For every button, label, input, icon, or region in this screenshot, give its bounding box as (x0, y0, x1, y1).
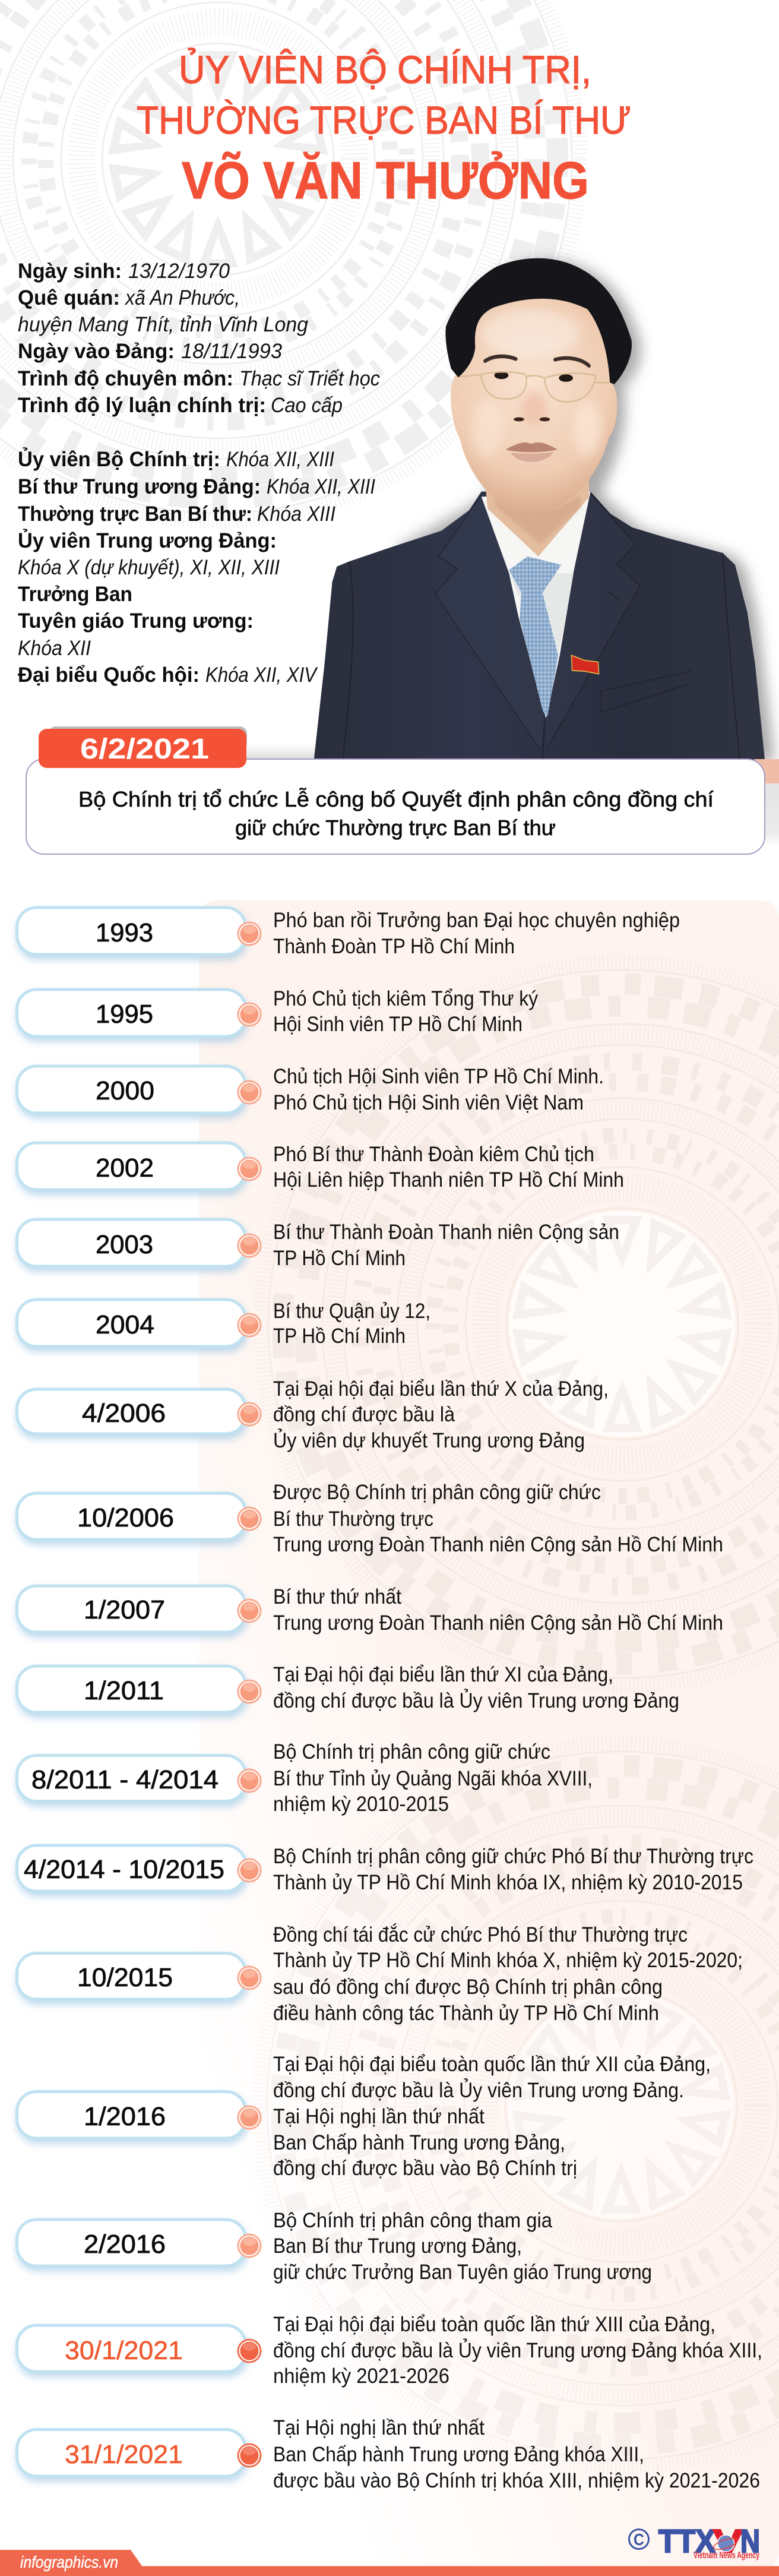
personal details text block: Cao cấp (271, 394, 343, 417)
party positions text block: Khóa XII, XIV (205, 663, 318, 687)
timeline row: 10/2015: điều hành công tác Thành ủy TP Hồ Chí Minh (273, 2002, 659, 2025)
timeline row: 30/1/2021: Tại Đại hội đại biểu toàn quốc lần thứ XIII của Đảng, (273, 2313, 715, 2336)
timeline row: 2/2016: giữ chức Trưởng Ban Tuyên giáo Trung ương (273, 2261, 652, 2284)
timeline row: 1/2016: Ban Chấp hành Trung ương Đảng, (273, 2131, 565, 2154)
tie (509, 557, 561, 716)
agency letters (658, 2523, 760, 2559)
timeline row: 8/2011 - 4/2014: Bộ Chính trị phân công giữ chức (273, 1740, 550, 1763)
timeline row: 10/2006: Được Bộ Chính trị phân công giữ chức (273, 1481, 601, 1504)
title: VÕ VĂN THƯỞNG (182, 151, 589, 210)
eyebrows (485, 356, 589, 366)
timeline row: 10/2015: sau đó đồng chí được Bộ Chính trị phân công (273, 1976, 663, 1999)
TTXVN logo (629, 2523, 760, 2561)
party positions text block: Ủy viên Bộ Chính trị: (18, 447, 220, 471)
timeline row: 4/2006: đồng chí được bầu là (273, 1403, 455, 1426)
party positions text block: Khóa XII (18, 637, 91, 660)
timeline row: 1995: 1995 (96, 1000, 153, 1029)
eyes (494, 372, 573, 382)
timeline row: 1/2011: đồng chí được bầu là Ủy viên Trung ương Đảng (273, 1689, 679, 1712)
footer site name: infographics.vn (20, 2553, 118, 2571)
hair (445, 258, 632, 384)
timeline row: 1995: Phó Chủ tịch kiêm Tổng Thư ký (273, 987, 538, 1010)
party pin (571, 655, 599, 674)
nose (514, 417, 550, 421)
middle drum watermark (260, 962, 779, 1686)
timeline row: 2004: Bí thư Quận ủy 12, (273, 1300, 430, 1323)
timeline row: 1/2016: đồng chí được bầu vào Bộ Chính trị (273, 2157, 577, 2180)
timeline row: 1/2016: 1/2016 (84, 2102, 166, 2131)
timeline row: 31/1/2021: 31/1/2021 (65, 2440, 183, 2469)
timeline row: 1/2016 (17, 2053, 711, 2180)
personal details text block (18, 260, 380, 417)
personal details text block: 18/11/1993 (181, 340, 283, 363)
lapel shading (343, 493, 740, 759)
timeline row: 2002 (17, 1143, 624, 1191)
title: THƯỜNG TRỰC BAN BÍ THƯ (137, 98, 631, 142)
party positions text block: Bí thư Trung ương Đảng: (18, 475, 261, 498)
timeline row: 2/2016: 2/2016 (84, 2230, 166, 2259)
lower drum watermark (259, 1743, 779, 2468)
card panel (26, 759, 765, 854)
icon: globe (712, 2535, 739, 2552)
personal details text block: Trình độ lý luận chính trị: (18, 394, 266, 417)
timeline row: 10/2006: Trung ương Đoàn Thanh niên Cộng sản Hồ Chí Minh (273, 1533, 723, 1556)
party positions text block: Khóa X (dự khuyết), XI, XII, XIII (18, 556, 280, 579)
timeline row: 31/1/2021 (17, 2416, 760, 2492)
icon: copyright: C (634, 2530, 644, 2549)
timeline row: 2002: Hội Liên hiệp Thanh niên TP Hồ Chí Minh (273, 1168, 624, 1191)
card text: Bộ Chính trị tổ chức Lễ công bố Quyết định phân công đồng chí (78, 787, 714, 811)
timeline row: 1/2011 (17, 1663, 679, 1712)
party positions text block (18, 447, 375, 687)
suit jacket (314, 492, 765, 761)
date card (26, 759, 765, 854)
timeline row: 4/2014 - 10/2015: 4/2014 - 10/2015 (24, 1855, 224, 1884)
timeline row: 4/2006 (17, 1377, 609, 1452)
timeline row: 2002: 2002 (96, 1153, 154, 1183)
timeline row: 30/1/2021 (17, 2313, 762, 2388)
timeline row: 10/2006: Bí thư Thường trực (273, 1507, 433, 1531)
facial highlights (482, 309, 580, 357)
timeline row: 1993: 1993 (96, 918, 153, 947)
timeline row: 8/2011 - 4/2014: 8/2011 - 4/2014 (31, 1765, 218, 1794)
party positions text block: Khóa XII, XIII (226, 448, 334, 471)
personal details text block: xã An Phước, (124, 286, 240, 309)
timeline row: 2000 (17, 1065, 604, 1114)
timeline row: 2003: 2003 (96, 1230, 153, 1259)
portrait photo illustration (314, 258, 775, 762)
timeline row: 4/2006: Tại Đại hội đại biểu lần thứ X của Đảng, (273, 1377, 609, 1401)
timeline row: 2000: 2000 (96, 1076, 154, 1105)
timeline row: 2/2016: Ban Bí thư Trung ương Đảng, (273, 2234, 522, 2258)
icon: copyright (629, 2529, 648, 2549)
timeline row: 31/1/2021: Ban Chấp hành Trung ương Đảng khóa XIII, (273, 2443, 644, 2466)
peach strip behind card (754, 759, 779, 783)
timeline row: 8/2011 - 4/2014: nhiệm kỳ 2010-2015 (273, 1793, 449, 1816)
shirt and collar (482, 492, 591, 718)
date badge: 6/2/2021 (80, 734, 209, 765)
gray shadow behind card (754, 783, 779, 846)
gray fade beside date badge (246, 744, 318, 760)
timeline row: 4/2006: 4/2006 (82, 1399, 166, 1428)
date badge (39, 726, 247, 768)
timeline row: 4/2014 - 10/2015 (17, 1845, 753, 1894)
timeline row: 10/2015: 10/2015 (77, 1963, 173, 1992)
timeline row: 2003: TP Hồ Chí Minh (273, 1247, 406, 1270)
timeline row: 1/2007: Trung ương Đoàn Thanh niên Cộng sản Hồ Chí Minh (273, 1611, 723, 1635)
top drum watermark (0, 0, 580, 521)
timeline row: 10/2015 (17, 1923, 743, 2025)
personal details text block: Ngày sinh: (18, 260, 122, 283)
glasses (460, 372, 609, 402)
footer band (0, 2550, 779, 2576)
timeline row: 1/2016: Tại Hội nghị lần thứ nhất (273, 2105, 484, 2128)
timeline row: 30/1/2021: 30/1/2021 (65, 2336, 183, 2365)
timeline row: 1/2011: 1/2011 (84, 1676, 164, 1705)
timeline row: 30/1/2021: nhiệm kỳ 2021-2026 (273, 2365, 449, 2388)
personal details text block: Thạc sĩ Triết học (239, 367, 380, 390)
party positions text block: Khóa XII, XIII (267, 475, 375, 498)
timeline row: 31/1/2021: Tại Hội nghị lần thứ nhất (273, 2416, 484, 2439)
personal details text block: Quê quán: (18, 286, 120, 309)
timeline row: 1995: Hội Sinh viên TP Hồ Chí Minh (273, 1013, 522, 1036)
timeline row: 10/2015: Thành ủy TP Hồ Chí Minh khóa X, nhiệm kỳ 2015-2020; (273, 1949, 743, 1972)
timeline row: 1993: Phó ban rồi Trưởng ban Đại học chuyên nghiệp (273, 909, 680, 932)
party positions text block: Thường trực Ban Bí thư: (18, 502, 252, 526)
timeline row: 2/2016 (17, 2209, 652, 2284)
personal details text block: Ngày vào Đảng: (18, 340, 175, 363)
timeline row: 10/2006: 10/2006 (77, 1503, 174, 1532)
timeline row: 1995 (17, 987, 538, 1036)
timeline row: 1/2007 (17, 1585, 723, 1635)
timeline row: 2000: Chủ tịch Hội Sinh viên TP Hồ Chí Minh. (273, 1065, 604, 1088)
agency letters: N (740, 2523, 760, 2559)
timeline row: 10/2006 (17, 1481, 723, 1556)
title: ỦY VIÊN BỘ CHÍNH TRỊ, (179, 48, 591, 91)
timeline row: 2004 (17, 1300, 430, 1348)
timeline row: 8/2011 - 4/2014: Bí thư Tỉnh ủy Quảng Ngãi khóa XVIII, (273, 1767, 593, 1790)
timeline row: 10/2015: Đồng chí tái đắc cử chức Phó Bí thư Thường trực (273, 1923, 688, 1946)
agency letters: TTX (658, 2523, 715, 2559)
timeline row: 1/2007: 1/2007 (84, 1595, 165, 1624)
timeline row: 2004: TP Hồ Chí Minh (273, 1325, 406, 1348)
lips (505, 442, 558, 452)
timeline row: 2003: Bí thư Thành Đoàn Thanh niên Cộng sản (273, 1221, 619, 1244)
timeline row: 1/2011: Tại Đại hội đại biểu lần thứ XI của Đảng, (273, 1663, 613, 1686)
timeline row: 2002: Phó Bí thư Thành Đoàn kiêm Chủ tịch (273, 1143, 594, 1166)
card text: giữ chức Thường trực Ban Bí thư (235, 816, 556, 840)
timeline row: 1993 (17, 908, 680, 958)
personal details text block: huyện Mang Thít, tỉnh Vĩnh Long (18, 313, 309, 336)
party positions text block: Trưởng Ban (18, 583, 132, 606)
party positions text block: Ủy viên Trung ương Đảng: (18, 529, 277, 552)
timeline row: 2003 (17, 1219, 619, 1270)
timeline row: 4/2006: Ủy viên dự khuyết Trung ương Đảng (273, 1428, 585, 1452)
timeline row: 4/2014 - 10/2015: Thành ủy TP Hồ Chí Minh khóa IX, nhiệm kỳ 2010-2015 (273, 1871, 743, 1894)
soft photo shadow (399, 261, 775, 762)
timeline row: 2004: 2004 (96, 1310, 154, 1339)
timeline row: 1/2007: Bí thư thứ nhất (273, 1585, 401, 1608)
personal details text block: 13/12/1970 (128, 260, 230, 283)
face (451, 293, 618, 511)
neck (484, 473, 589, 557)
timeline row: 1/2016: Tại Đại hội đại biểu toàn quốc lần thứ XII của Đảng, (273, 2053, 711, 2076)
timeline row: 1993: Thành Đoàn TP Hồ Chí Minh (273, 935, 515, 958)
timeline row: 2000: Phó Chủ tịch Hội Sinh viên Việt Nam (273, 1091, 584, 1114)
party positions text block: Đại biểu Quốc hội: (18, 663, 200, 687)
timeline row: 2/2016: Bộ Chính trị phân công tham gia (273, 2209, 552, 2232)
party positions text block: Khóa XIII (257, 502, 335, 526)
timeline row: 8/2011 - 4/2014 (17, 1740, 593, 1816)
timeline row: 1/2016: đồng chí được bầu là Ủy viên Trung ương Đảng. (273, 2078, 684, 2102)
card text (78, 787, 714, 840)
personal details text block: Trình độ chuyên môn: (18, 367, 233, 390)
party positions text block: Tuyên giáo Trung ương: (18, 609, 254, 633)
peach background panel (199, 900, 779, 2569)
title (137, 48, 631, 210)
agency letters: V (713, 2523, 743, 2559)
